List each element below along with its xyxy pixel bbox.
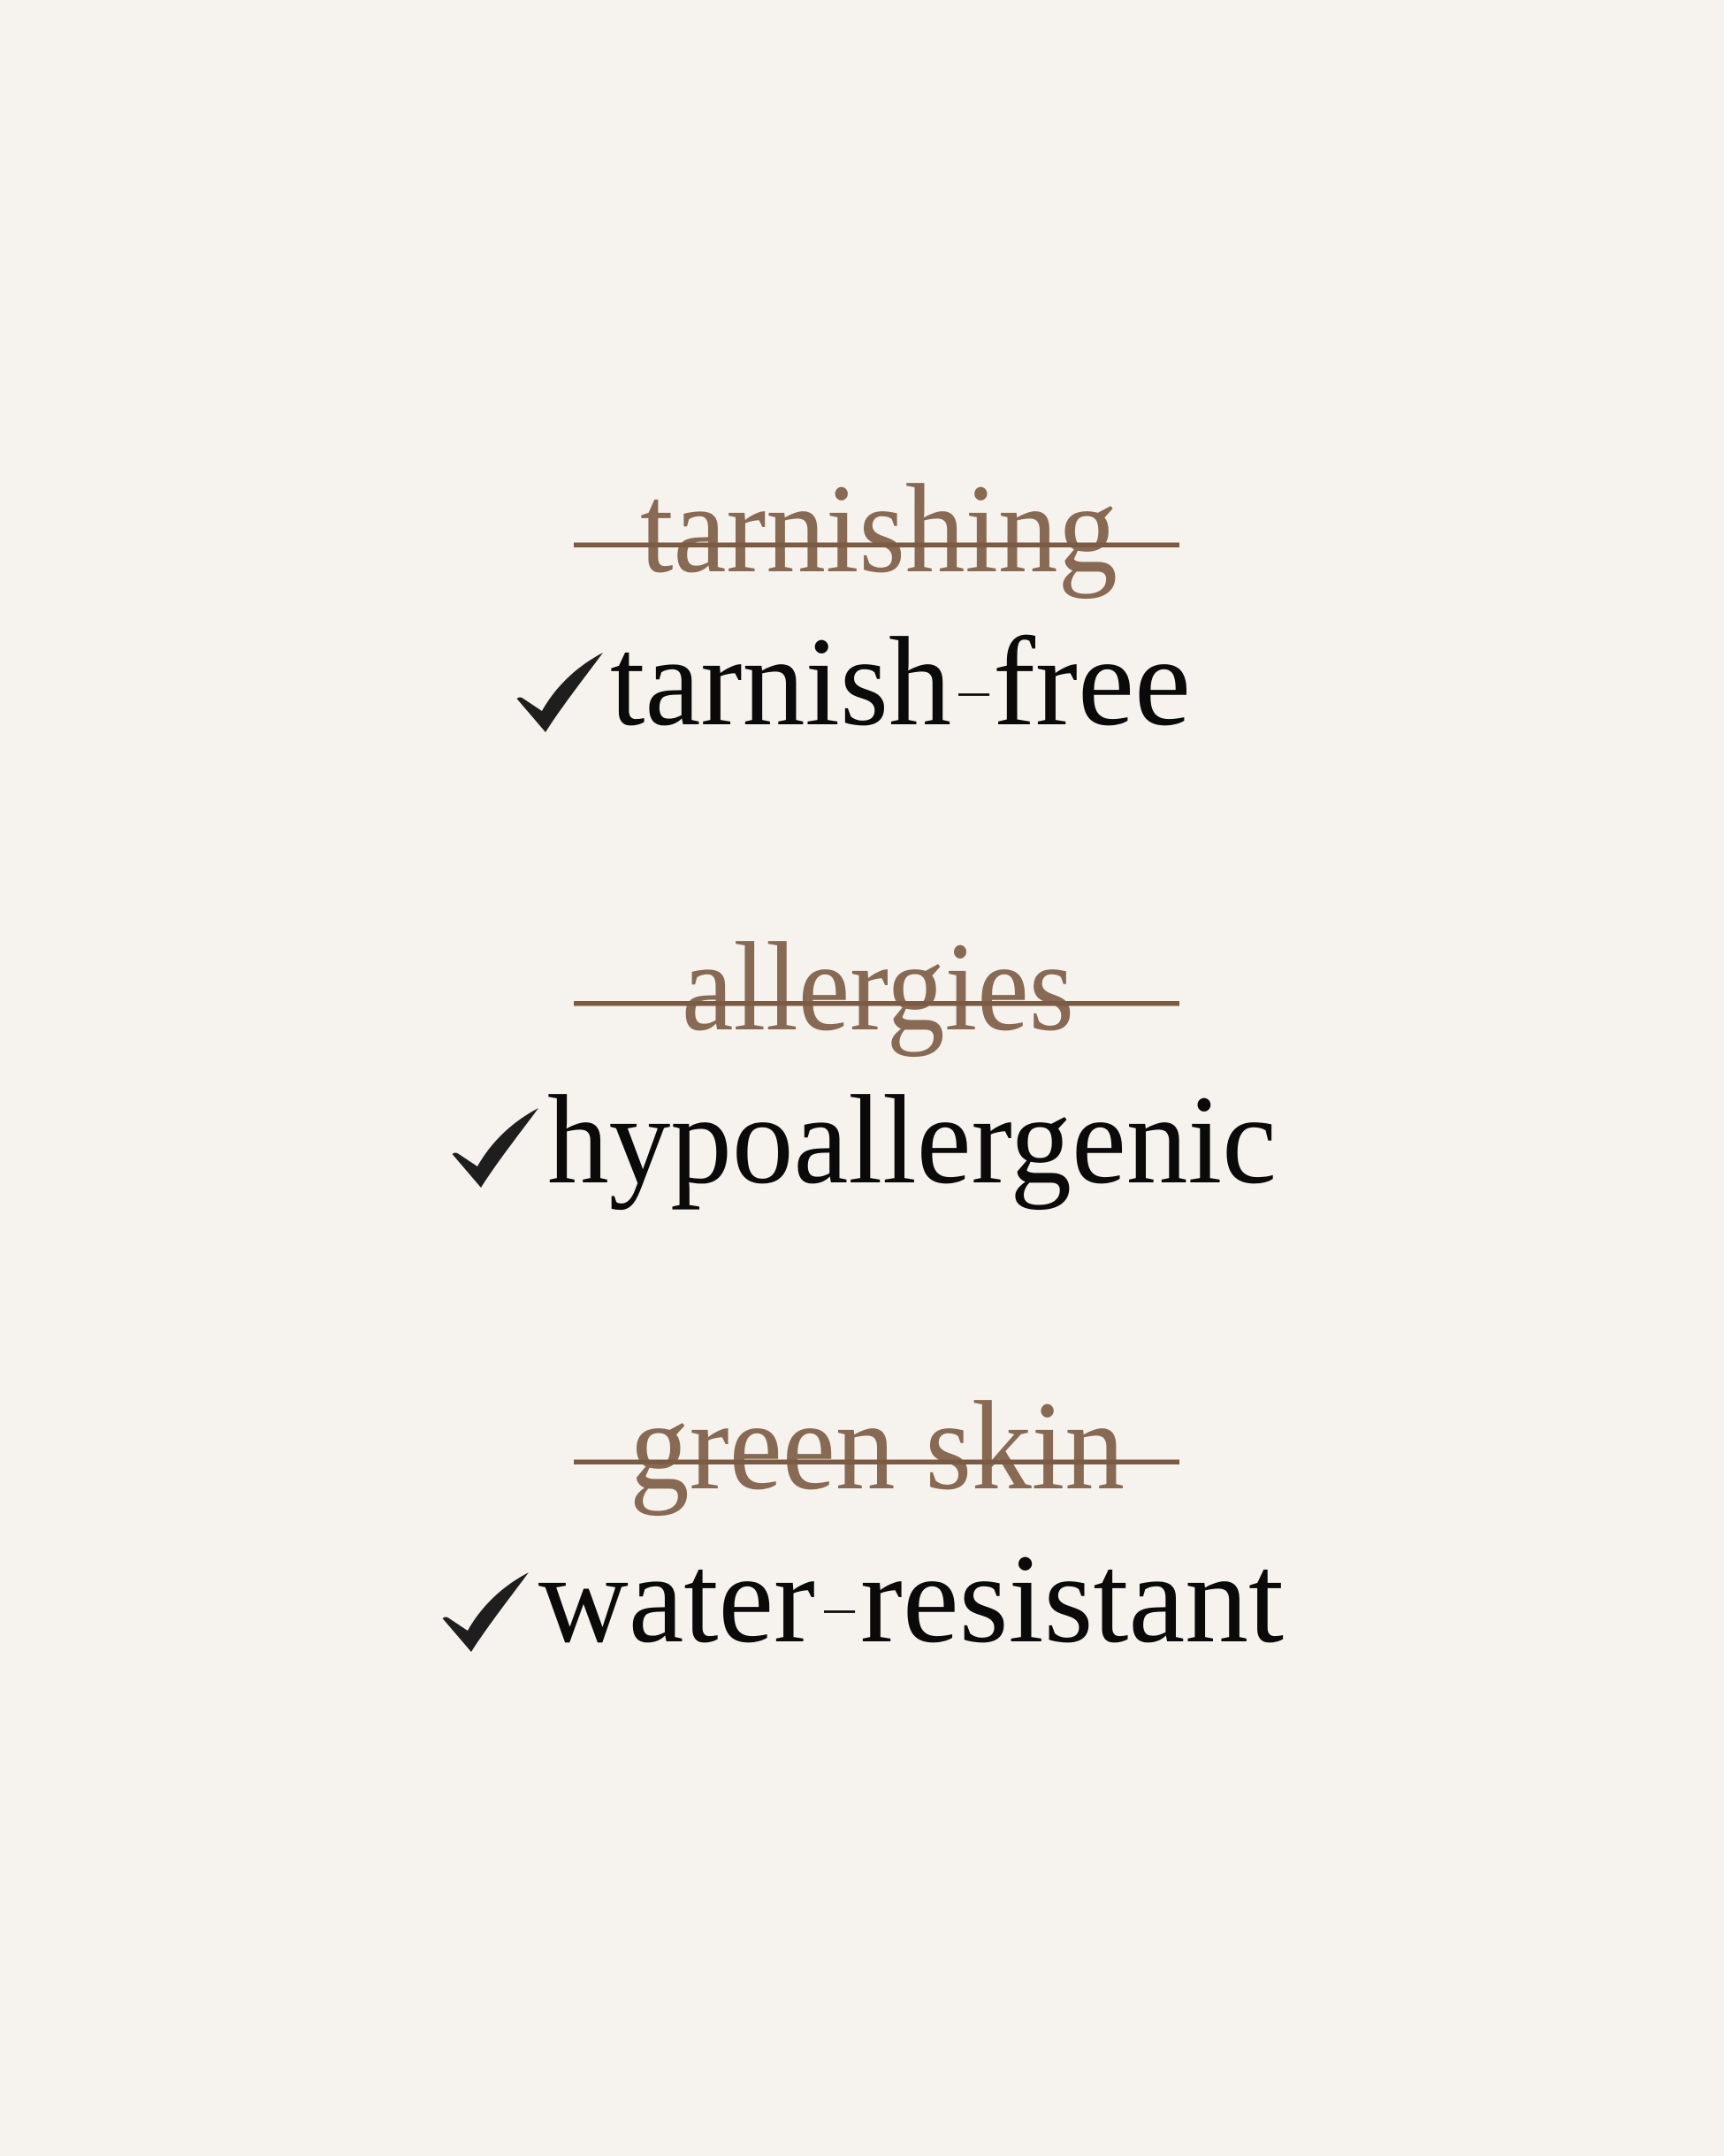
row 1: tarnishing to tarnish-free — [516, 459, 1191, 753]
icon: check mark — [453, 1108, 538, 1188]
benefit text: tarnish-free: free — [993, 612, 1191, 753]
icon: check mark — [442, 1572, 529, 1652]
row 3: green skin to water-resistant — [442, 1376, 1284, 1670]
benefit text: water-resistant: water — [538, 1529, 815, 1670]
benefit text: water-resistant: resistant — [860, 1529, 1284, 1670]
benefit text: tarnish-free: tarnish — [610, 612, 951, 753]
struck-through word: green skin: green skin — [629, 1376, 1125, 1517]
icon: check mark — [516, 653, 603, 732]
benefit text: water-resistant — [538, 1529, 1284, 1670]
struck-through word: allergies: allergies — [682, 917, 1074, 1058]
benefit text: water-resistant: - — [820, 1591, 859, 1626]
struck-through word: tarnishing: tarnishing — [640, 459, 1118, 600]
benefit text: hypoallergenic: hypoallergenic — [547, 1070, 1277, 1211]
benefit text: tarnish-free — [610, 612, 1191, 753]
benefit text: tarnish-free: - — [954, 674, 994, 709]
row 2: allergies to hypoallergenic — [453, 917, 1277, 1211]
